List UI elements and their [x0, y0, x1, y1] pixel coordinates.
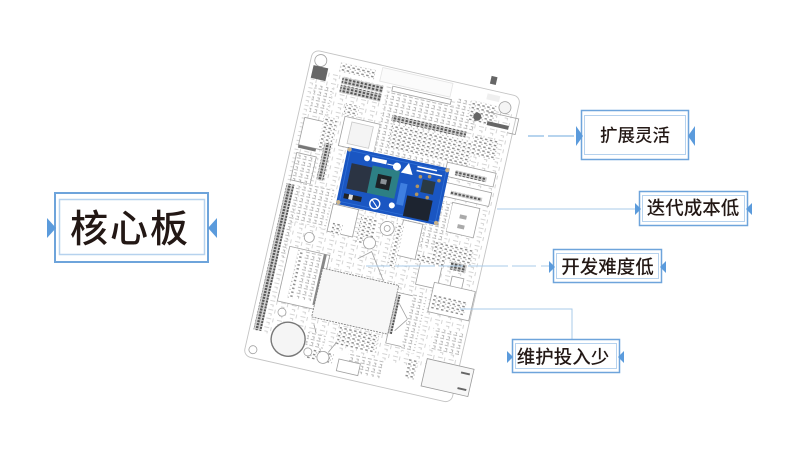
- label: 扩展灵活: [576, 110, 695, 160]
- label: 开发难度低: 开发难度低: [561, 256, 654, 278]
- label dot and triangle: [392, 160, 443, 181]
- label: 核心板: 核心板: [70, 209, 190, 251]
- connector: maintenance: [460, 309, 572, 339]
- certification marks: [369, 198, 381, 210]
- connector: cost: [497, 208, 637, 210]
- right memory chip: [403, 195, 433, 221]
- board components: [248, 37, 538, 402]
- connector: flexible: [528, 135, 578, 137]
- left memory chip: [346, 163, 373, 193]
- label: 维护投入少: 维护投入少: [517, 346, 609, 368]
- label: 开发难度低: [549, 250, 666, 282]
- label: 扩展灵活: 扩展灵活: [600, 126, 670, 146]
- label: 迭代成本低: [635, 192, 752, 226]
- label: 迭代成本低: 迭代成本低: [647, 198, 739, 218]
- label: 维护投入少: [507, 340, 624, 372]
- core module: [336, 147, 450, 226]
- processor: [367, 166, 400, 199]
- mounting holes: [336, 147, 450, 226]
- ethernet jack: [421, 359, 474, 397]
- board trace underlay: [253, 68, 513, 377]
- logo: [364, 155, 396, 167]
- small chip: [420, 179, 436, 195]
- label: 核心板: [47, 193, 217, 262]
- battery: [268, 319, 308, 360]
- connector: difficulty: [366, 265, 550, 267]
- module bay shield: [312, 268, 399, 334]
- circuit board: [243, 36, 538, 406]
